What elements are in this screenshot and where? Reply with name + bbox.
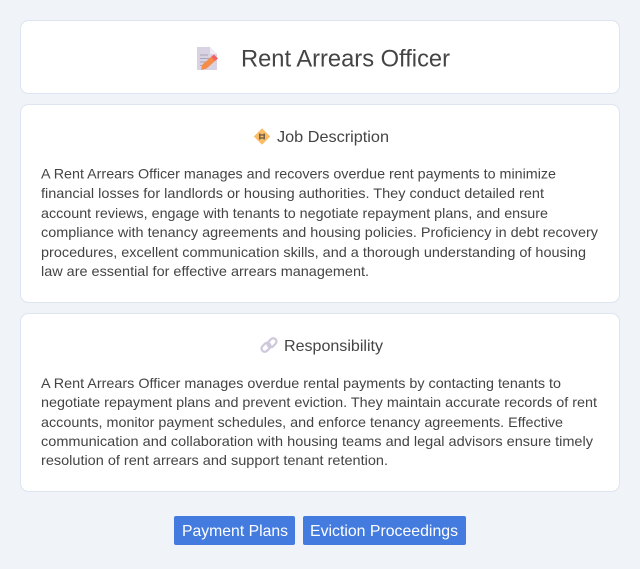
tag: payment plans: Payment Plans [182,523,288,540]
text block: job description: account reviews, engage with tenants to negotiate repayment plans, and ensure [41,205,548,221]
heading: responsibility: Responsibility [284,338,383,355]
text block: responsibility [41,375,597,468]
text block: job description: procedures, excellent communication skills, and a thorough understanding of housing [41,244,586,260]
text block: job description [41,166,598,279]
text block: responsibility: negotiate repayment plans and prevent eviction. They maintain accurate records of rent [41,394,597,410]
text block: job description: law are essential for effective arrears management. [41,263,369,279]
title: Rent Arrears Officer [241,46,450,72]
tag: eviction proceedings [303,516,466,545]
text block: responsibility: accounts, monitor payment schedules, and enforce tenancy agreements. Effective [41,414,563,430]
text block: job description: A Rent Arrears Officer manages and recovers overdue rent payments to minimize [41,166,556,182]
tag: payment plans [174,516,295,545]
panel: responsibility [20,314,620,492]
panel: title card [20,20,620,94]
heading: job description: Job Description [277,129,389,146]
icon: chain link [260,337,278,353]
icon: document with pencil [197,47,218,70]
text block: job description: financial losses for landlords or housing authorities. They conduct detailed rent [41,185,544,201]
text block: responsibility: A Rent Arrears Officer manages overdue rental payments by contacting tenants to [41,375,561,391]
text block: job description: compliance with tenancy agreements and housing policies. Proficiency in debt recovery [41,224,598,240]
text block: responsibility: communication and collaboration with housing teams and legal advisors ensure timely [41,433,593,449]
tag: eviction proceedings: Eviction Proceedings [310,523,458,540]
text block: responsibility: resolution of rent arrears and support tenant retention. [41,452,388,468]
panel: job description [20,104,620,302]
icon: orange diamond sign [254,129,270,144]
